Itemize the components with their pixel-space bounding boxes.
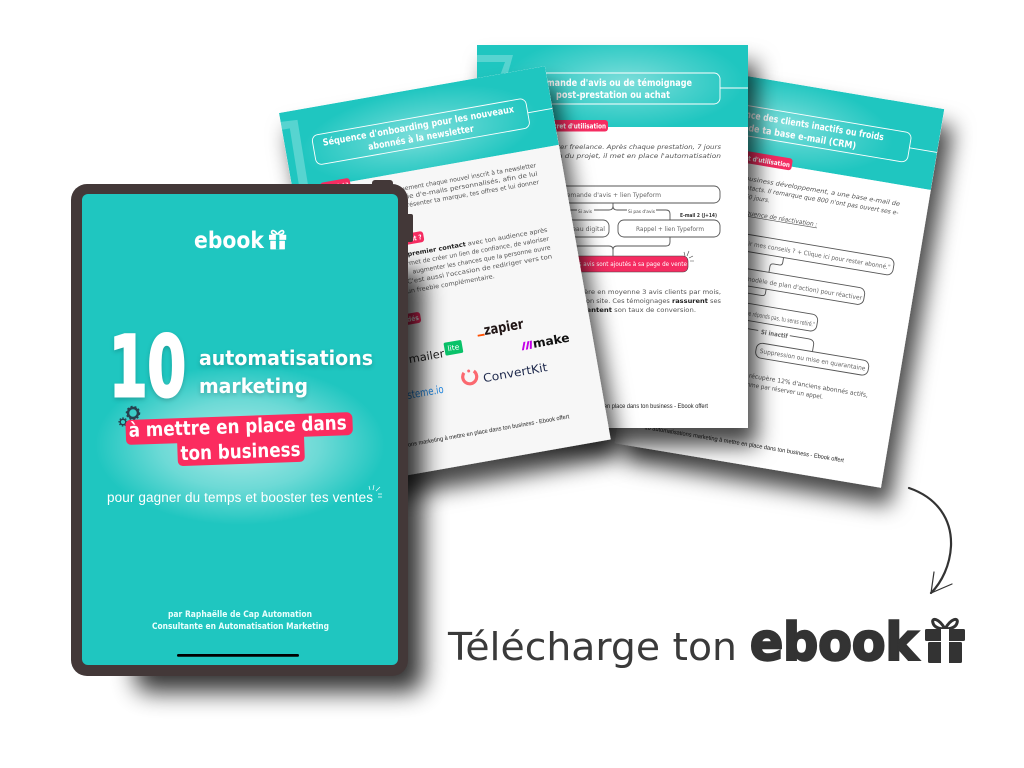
page 3 title box [694,97,940,167]
page 1 intro text: présenter ta marque, tes offres et lui donner [402,178,540,210]
cover headline [109,318,373,416]
page 3 title box: de ta base e-mail (CRM) [747,123,857,152]
page 2 tag: usage example [505,120,608,132]
page 2 workflow diagram: E-mail 2 (J+14) [680,213,717,219]
author credit [152,610,329,632]
tablet frame and buttons [71,180,413,676]
highlighted subtitle: ton business [180,438,301,465]
logo: zapier [476,316,525,340]
page 3 intro text: contacts. Il remarque que 800 n'ont pas ouvert ses e- [738,182,899,217]
page 2 result text [565,288,721,314]
logo: ConvertKit: ConvertKit [482,360,549,385]
arrow pointing to call to action [909,488,952,593]
page 1 explanation text [397,226,555,296]
page 3 workflow diagram: ne réponds pas, tu seras retiré." [745,309,816,329]
sparks [369,485,382,497]
page 1 footer: 10 automatisations marketing à mettre en place dans ton business - Ebook offert [370,414,570,455]
page 3 header band [748,76,944,190]
panel: page 1, newsletter onboarding [279,66,611,486]
home bar [177,654,299,657]
page 2 intro text: à la fin du projet, il met en place l'automatisation [537,152,721,160]
panel: page 3, re-engagement of inactive clients [615,62,945,488]
page 2 intro text: copywriter freelance. Après chaque prestation, 7 jours [530,143,722,151]
page 2 result text: augmentent son taux de conversion. [565,307,696,314]
page 1 title box [311,94,555,165]
page 2 title box: Demande d'avis ou de témoignage [534,78,692,89]
page 2 result text: sur son site. Ces témoignages rassurent ses [570,297,721,305]
call to action: ebook [750,613,919,673]
page 3 title box: Relance des clients inactifs ou froids [726,106,885,143]
page 3 result text [738,370,869,408]
call to action: Télécharge ton [447,625,737,669]
logo: mailerlite: lite [447,342,460,353]
page 3 workflow diagram: Si inactif [760,329,788,340]
page 2 workflow diagram: Si avis [578,209,593,215]
page 2 workflow diagram: Si pas d'avis [628,209,656,215]
page 1 tag: why important: Pourquoi c'est important ? [338,233,423,256]
page 3 result text: il récupère 12% d'anciens abonnés actifs, [743,371,869,399]
page 1 intro text: automatiquement chaque nouvel inscrit à ta newsletter [370,161,537,198]
tablet screen [82,194,398,665]
cover logo: ebook with gift: ebook [194,228,265,254]
call to action [447,613,965,673]
page 3 intro text: séquence de réactivation : [739,208,818,229]
page 3 workflow diagram: voir mes conseils ? + Clique ici pour rester abonné." [741,238,891,271]
page 1 sheet with shadow [279,66,611,486]
highlighted subtitle [125,411,354,468]
cover headline: automatisations [199,346,373,370]
highlighted subtitle: à mettre en place dans [128,411,347,442]
gift icon large [925,619,965,663]
page 2 sheet with shadow [477,45,748,428]
cover headline: marketing [199,374,308,398]
icon: gears [119,406,140,426]
author credit: Consultante en Automatisation Marketing [152,622,329,632]
page 3 workflow diagram: Suppression ou mise en quarantaine [759,348,866,373]
logo: systeme.io: systeme.io [397,383,445,404]
page 2 workflow diagram: Rappel + lien Typeform [636,226,704,233]
tablet mockup with ebook cover [71,180,423,692]
page 1 intro text [370,161,540,215]
panel: page 2, review request [477,34,748,428]
page 3 footer: 10 automatisations marketing à mettre en place dans ton business - Ebook offert [644,425,845,464]
page 3 tag: usage example [689,142,793,171]
page 1 explanation text: un freebie complémentaire. [406,272,495,295]
page 1 content [279,66,570,446]
logo: mailerlite [407,340,464,366]
page 1 tag: recommended tools: Outils recommandés [351,314,419,334]
cover glow [95,365,385,525]
page 1 title box: abonnés à la newsletter [367,123,475,153]
logo: make: make [532,331,571,351]
page 1 intro text: une série d'e-mails personnalisés, afin de lui [380,170,538,205]
logo: make [520,331,571,353]
page 2 workflow diagram: Les avis sont ajoutés à sa page de vente [572,260,687,268]
page 2 intro text [530,143,722,160]
tablet shadow [135,270,423,692]
page 2 result text: Il génère en moyenne 3 avis clients par mois, [565,288,721,296]
page 1 explanation text: premier contact avec ton audience après [407,226,548,258]
author credit: par Raphaëlle de Cap Automation [168,610,312,620]
logo: mailerlite: mailer [408,347,446,366]
page 1 tag: what it does: Ce qu'elle fait [324,181,349,193]
page 3 content [644,76,944,462]
page 1 explanation text: C'est aussi l'occasion de rediriger vers ton [407,253,553,286]
page 2 workflow diagram [505,186,720,272]
page 2 workflow diagram: Demande d'avis + lien Typeform [562,192,661,199]
tagline: pour gagner du temps et booster tes ventes [107,490,373,505]
page 2 footer: 10 automatisations marketing à mettre en place dans ton business - Ebook offert [506,404,708,410]
gift icon small [269,231,286,249]
page 1 tag: what it does [320,178,351,195]
page 2 title box [505,73,748,104]
page 2 workflow diagram: Cadeau digital [560,226,605,233]
page 1 explanation text: permet de créer un lien de confiance, de valoriser [399,235,550,269]
page 3 intro text [734,173,901,242]
page 3 workflow diagram [652,222,895,377]
page 3 intro text: business développement, a une base e-mail de [745,174,901,208]
logo: zapier: zapier [483,316,525,339]
page 3 tag: usage example: Exemple concret d'utilisation [698,146,791,169]
page 3 workflow diagram: (modèle de plan d'action) pour réactiver [743,274,863,302]
page 2 title box: post-prestation ou achat [556,90,670,101]
page 1 explanation text: augmenter les chances que la personne ouvre [412,244,551,276]
page 2 tag: usage example: Exemple concret d'utilisation [513,122,606,130]
page 1 title box: Séquence d'onboarding pour les nouveaux [322,104,515,149]
page 3 result text: comme par réserver un appel. [738,379,824,401]
page 3 sheet with shadow [615,64,944,488]
page 2 header band [477,45,748,127]
page 1 header band [279,66,559,184]
cover headline: 10 [109,318,186,416]
page 3 intro text: 60 jours. [744,193,770,204]
logo: ConvertKit [462,356,549,389]
